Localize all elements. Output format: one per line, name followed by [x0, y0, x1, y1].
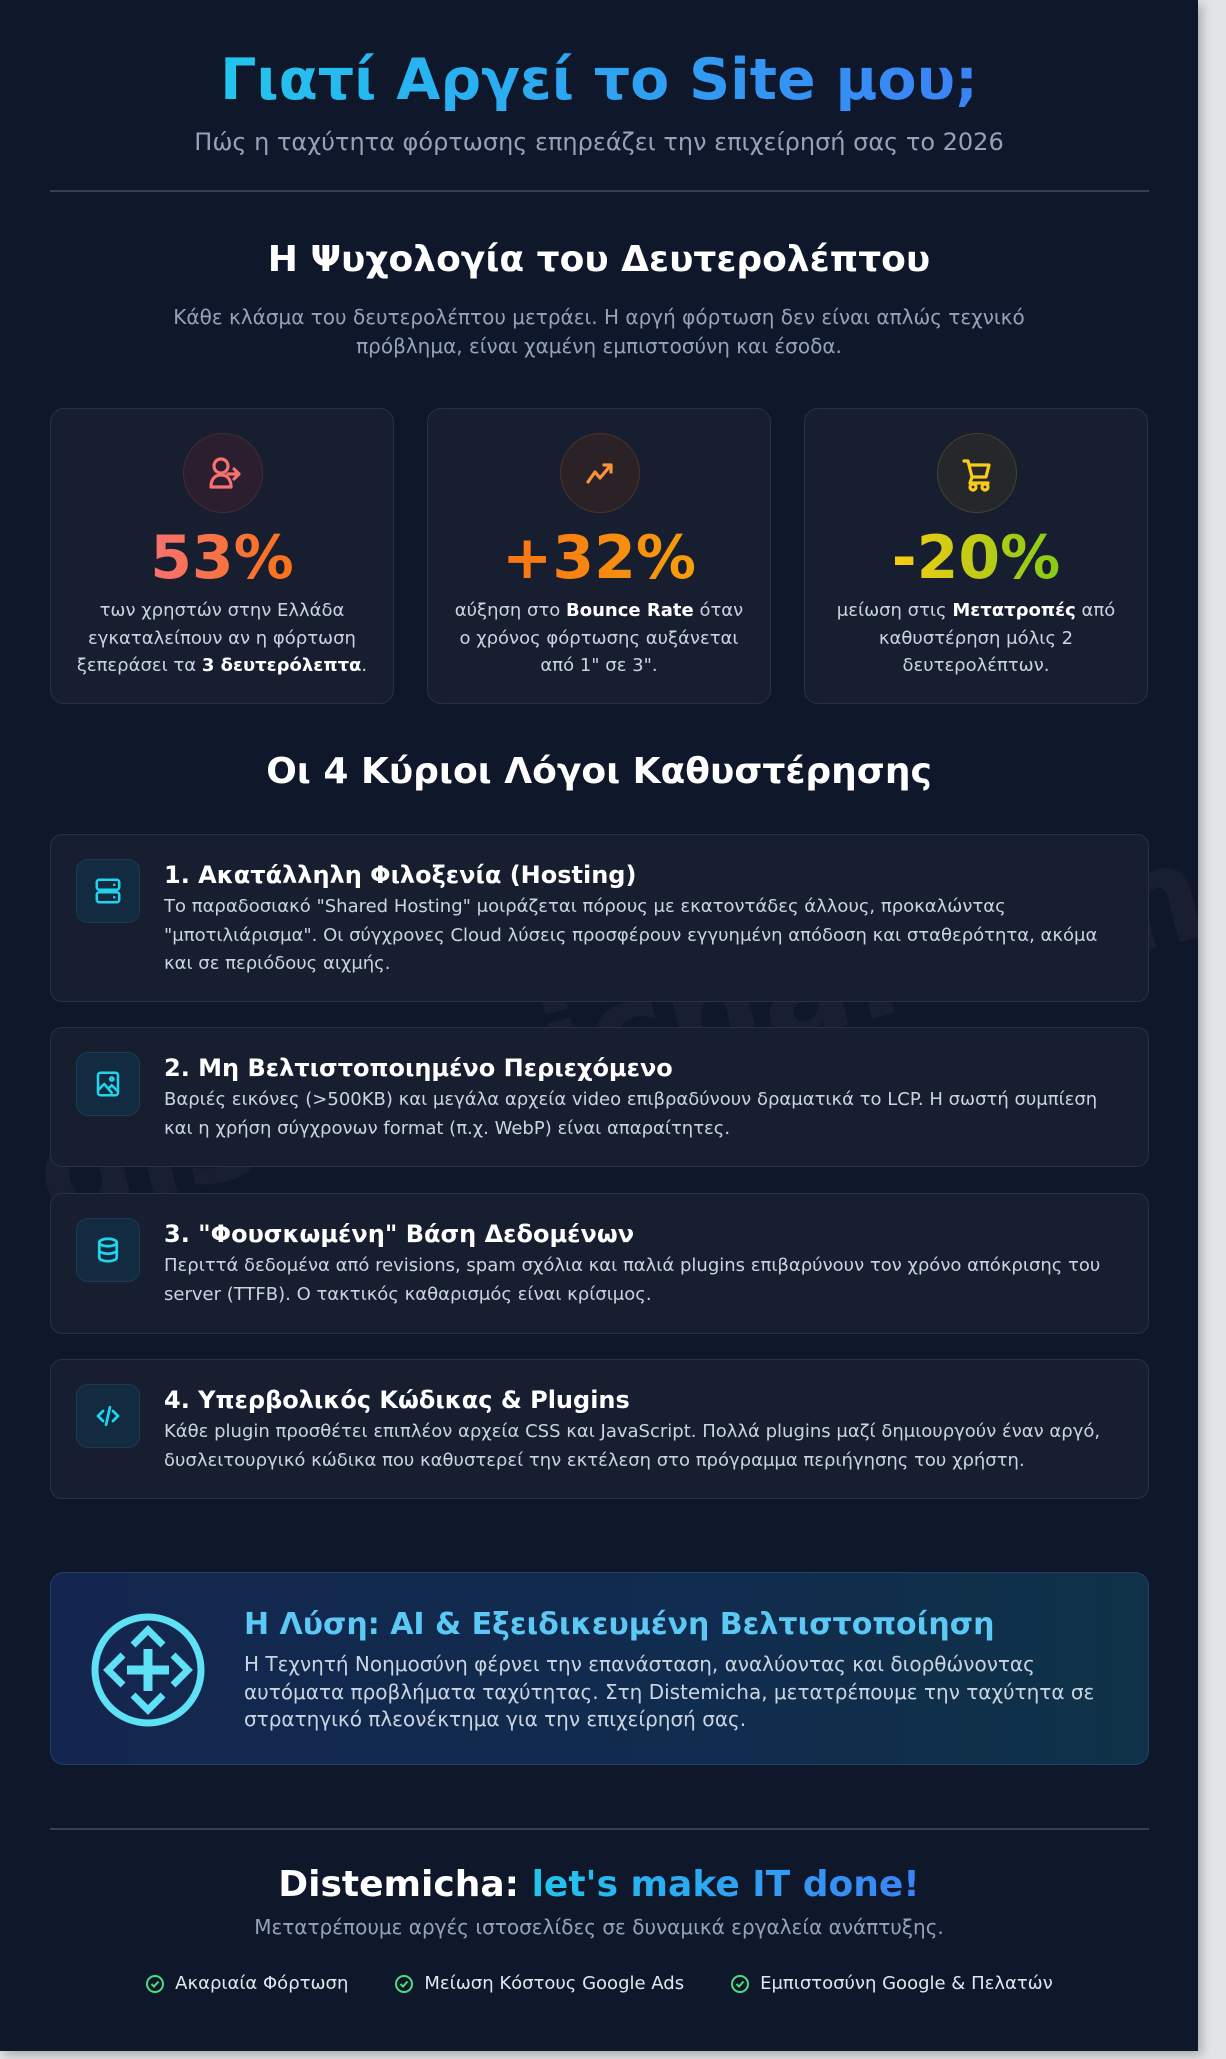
stat card 2 [427, 408, 771, 704]
check 1: Ακαριαία Φόρτωση [175, 1973, 348, 1994]
section heading: reasons: Οι 4 Κύριοι Λόγοι Καθυστέρησης [266, 751, 932, 792]
solution text: Η Τεχνητή Νοημοσύνη φέρνει την επανάσταση, αναλύοντας και διορθώνοντας αυτόματα προβλήματα ταχύτητας. Στη Distemicha, μετατρέπουμε την ταχύτητα σε στρατηγικό πλεονέκτημα για την επιχείρησή σας. [244, 1652, 1094, 1731]
icon: trend up [560, 433, 640, 513]
watermark: distemicha.com [20, 812, 1198, 1255]
reason 3: 3. "Φουσκωμένη" Βάση Δεδομένων [164, 1220, 634, 1248]
reason 3: Περιττά δεδομένα από revisions, spam σχόλια και παλιά plugins επιβαρύνουν τον χρόνο απόκρισης του server (TTFB). Ο τακτικός καθαρισμός είναι κρίσιμος. [164, 1255, 1100, 1304]
check 3: Εμπιστοσύνη Google & Πελατών [760, 1973, 1053, 1994]
feature checks [146, 1973, 1053, 1994]
stat card 3: μείωση στις Μετατροπές από καθυστέρηση μόλις 2 δευτερολέπτων. [837, 600, 1115, 676]
title: Γιατί Αργεί το Site μου; [220, 47, 978, 113]
reason 4: Κάθε plugin προσθέτει επιπλέον αρχεία CSS και JavaScript. Πολλά plugins μαζί δημιουργούν έναν αργό, δυσλειτουργικό κώδικα που καθυστερεί την εκτέλεση στο πρόγραμμα περιήγησης του χρήστη. [164, 1421, 1100, 1470]
stat: +32%: +32% [502, 523, 696, 593]
reason 4 [50, 1359, 1149, 1499]
icon: user leaving [183, 433, 263, 513]
check 2: Μείωση Κόστους Google Ads [424, 1973, 684, 1994]
icon: cart [937, 433, 1017, 513]
icon: code [76, 1384, 140, 1448]
reason 1: Το παραδοσιακό "Shared Hosting" μοιράζεται πόρους με εκατοντάδες άλλους, προκαλώντας "μποτιλιάρισμα". Οι σύγχρονες Cloud λύσεις προσφέρουν εγγυημένη απόδοση και σταθερότητα, ακόμα και σε περιόδους αιχμής. [164, 896, 1097, 974]
reason 2: 2. Μη Βελτιστοποιημένο Περιεχόμενο [164, 1054, 673, 1082]
stat card 1 [50, 408, 394, 704]
reason 1: 1. Ακατάλληλη Φιλοξενία (Hosting) [164, 861, 636, 889]
stat card 3 [804, 408, 1148, 704]
icon: database [76, 1218, 140, 1282]
solution title: Η Λύση: AI & Εξειδικευμένη Βελτιστοποίηση [244, 1607, 994, 1642]
icon: server [76, 859, 140, 923]
stat: -20%: -20% [892, 523, 1060, 593]
reason 2: Βαριές εικόνες (>500KB) και μεγάλα αρχεία video επιβραδύνουν δραματικά το LCP. Η σωστή συμπίεση και η χρήση σύγχρονων format (π.χ. WebP) είναι απαραίτητες. [164, 1089, 1097, 1138]
subtitle: Πώς η ταχύτητα φόρτωσης επηρεάζει την επιχείρησή σας το 2026 [194, 128, 1004, 156]
stat: 53%: 53% [150, 523, 294, 593]
stat card 2: αύξηση στο Bounce Rate όταν ο χρόνος φόρτωσης αυξάνεται από 1" σε 3". [455, 600, 743, 676]
solution box [50, 1572, 1149, 1765]
reason 1 [50, 834, 1149, 1002]
stat card 1: των χρηστών στην Ελλάδα εγκαταλείπουν αν η φόρτωση ξεπεράσει τα 3 δευτερόλεπτα. [77, 600, 367, 676]
section heading: psychology: Η Ψυχολογία του Δευτερολέπτου [268, 239, 930, 280]
reason 4: 4. Υπερβολικός Κώδικας & Plugins [164, 1386, 630, 1414]
icon: AI move [92, 1614, 204, 1726]
footer subtitle: Μετατρέπουμε αργές ιστοσελίδες σε δυναμικά εργαλεία ανάπτυξης. [254, 1915, 944, 1939]
reason 2 [50, 1027, 1149, 1167]
footer title: Distemicha: let's make IT done! [278, 1864, 920, 1905]
intro text: Κάθε κλάσμα του δευτερολέπτου μετράει. Η αργή φόρτωση δεν είναι απλώς τεχνικό πρόβλημα, είναι χαμένη εμπιστοσύνη και έσοδα. [173, 305, 1025, 358]
icon: image [76, 1052, 140, 1116]
reason 3 [50, 1193, 1149, 1334]
